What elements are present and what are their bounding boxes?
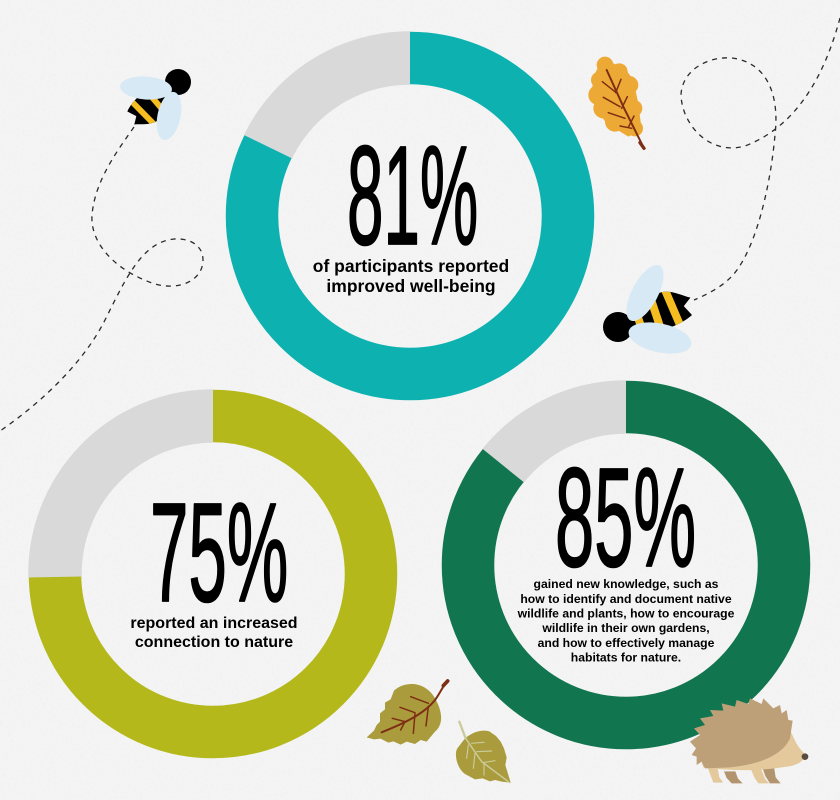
icon: brown-veined birch leaf bbox=[367, 681, 448, 745]
dashed flight path: left bee bbox=[0, 127, 203, 431]
big number: 81%: 81% bbox=[347, 117, 478, 275]
caption: well-being: improved well-being bbox=[326, 276, 496, 296]
donut panel: 75% connection to nature bbox=[55, 416, 371, 732]
dashed flight path: right bee bbox=[681, 18, 840, 300]
caption: well-being: of participants reported bbox=[313, 256, 509, 276]
donut panel: 81% well-being bbox=[252, 58, 568, 374]
icon: orange oak leaf bbox=[588, 57, 644, 148]
caption: new knowledge: habitats for nature. bbox=[571, 650, 681, 664]
nose bbox=[802, 753, 808, 760]
caption: new knowledge: how to identify and document native bbox=[520, 592, 732, 606]
donut chart: 75% bbox=[55, 416, 371, 732]
caption: new knowledge: and how to effectively manage bbox=[538, 636, 715, 650]
belly and face bbox=[700, 723, 806, 770]
caption: new knowledge: gained new knowledge, such as bbox=[534, 577, 719, 591]
caption: new knowledge: wildlife in their own gardens, bbox=[541, 621, 710, 635]
icon: hedgehog bbox=[690, 698, 808, 783]
donut chart: 81% bbox=[252, 58, 568, 374]
caption: connection to nature: connection to nature bbox=[135, 634, 293, 651]
spiny back bbox=[690, 698, 793, 768]
big number: 85%: 85% bbox=[555, 438, 696, 596]
caption: connection to nature: reported an increased bbox=[130, 615, 298, 632]
big number: 75%: 75% bbox=[150, 473, 288, 631]
legs bbox=[707, 767, 781, 783]
donut panel: 85% new knowledge bbox=[468, 407, 784, 723]
icon: right bee bbox=[603, 265, 692, 354]
donut chart: 85% bbox=[468, 407, 784, 723]
caption: new knowledge: wildlife and plants, how to encourage bbox=[517, 606, 735, 620]
icon: top-left bee bbox=[120, 69, 191, 140]
icon: pale-veined birch leaf bbox=[456, 722, 511, 783]
